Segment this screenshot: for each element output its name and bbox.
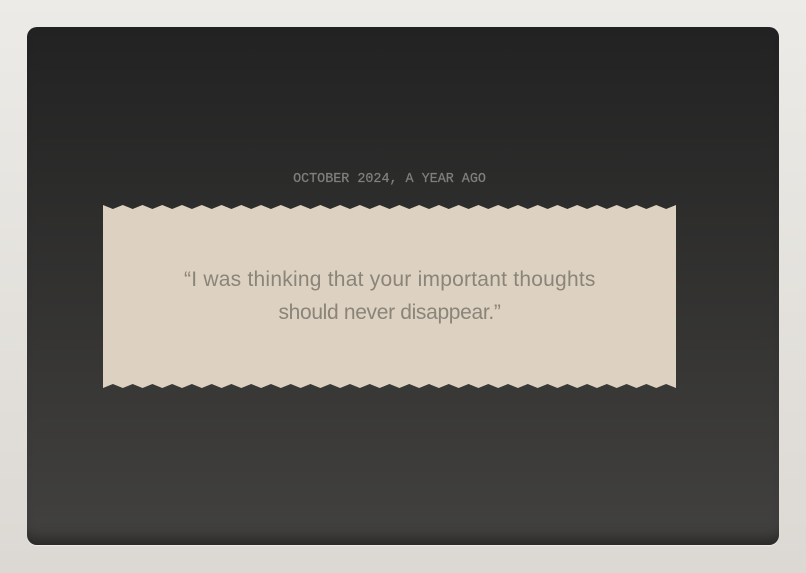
quote text xyxy=(184,268,596,324)
panel: torn paper quote: should never disappear.” xyxy=(278,300,501,324)
paper strip with zigzag edges xyxy=(103,205,676,388)
panel: torn paper quote xyxy=(103,205,676,388)
date heading: OCTOBER 2024, A YEAR AGO xyxy=(293,172,486,187)
panel: torn paper quote: “I was thinking that your important thoughts xyxy=(184,268,596,290)
